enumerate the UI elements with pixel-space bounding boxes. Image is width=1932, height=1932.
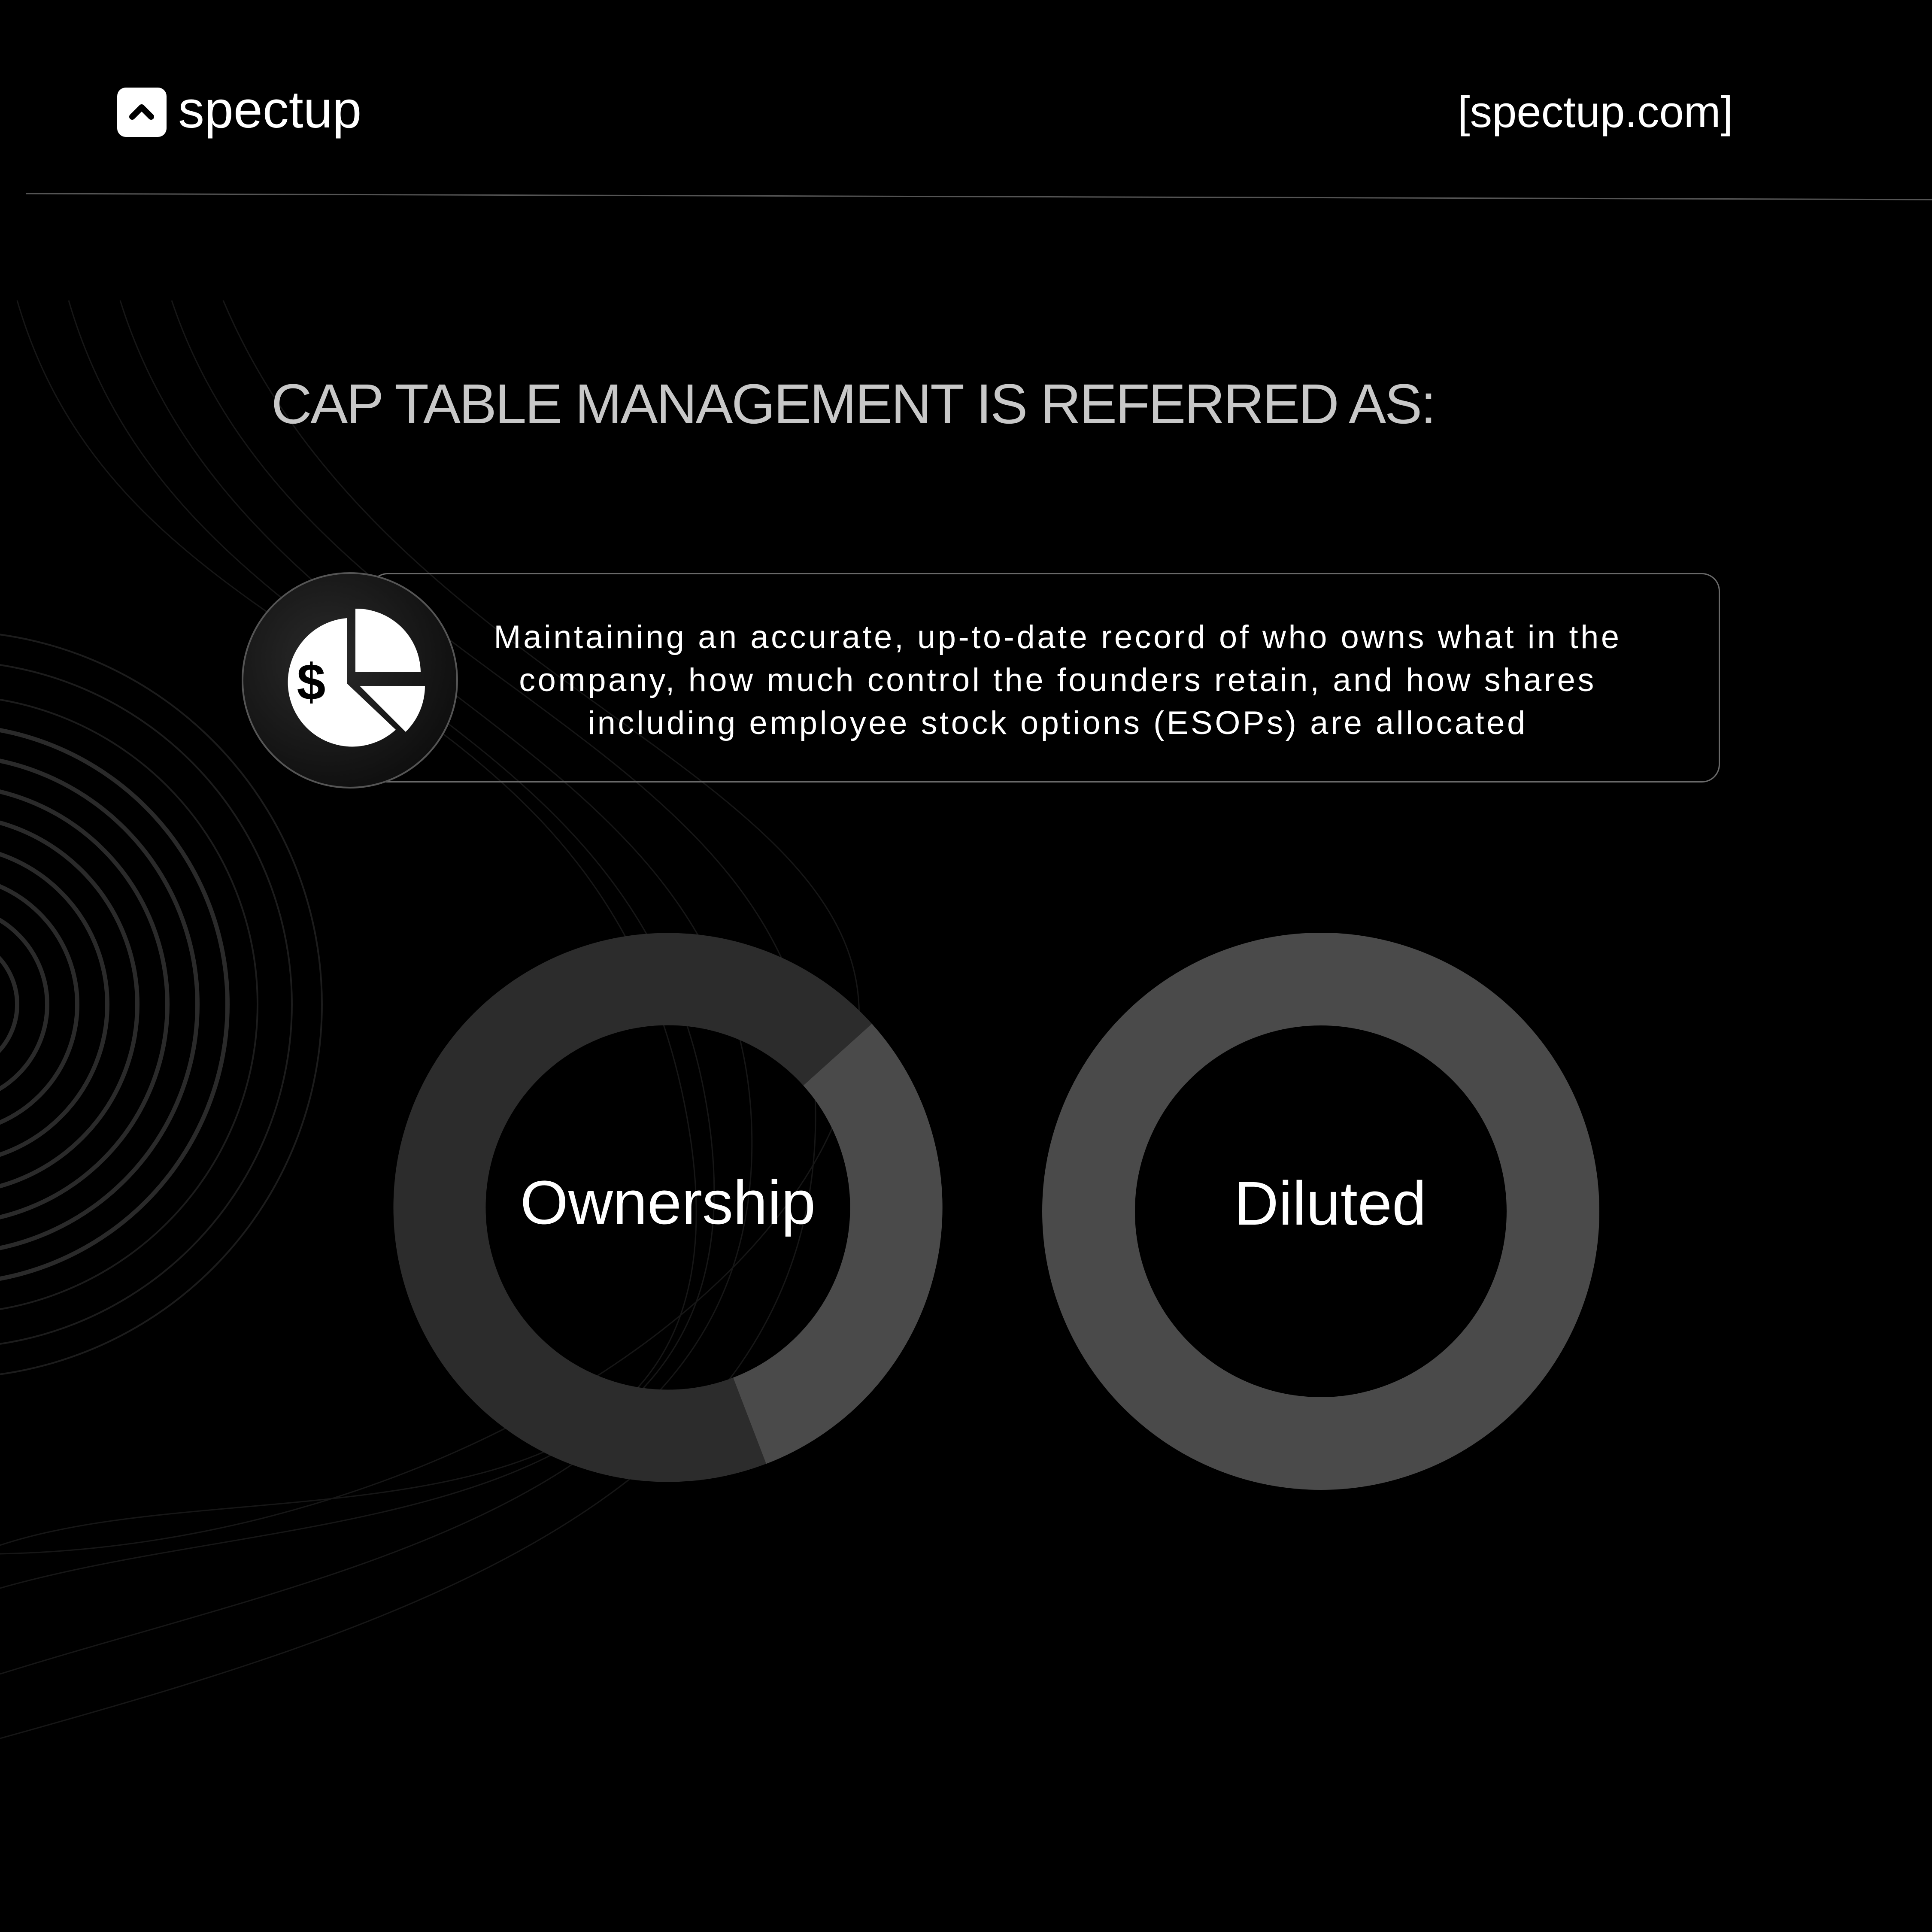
divider [0, 189, 1932, 206]
panel: definition card [370, 573, 1720, 783]
label: Diluted: Diluted [1234, 1169, 1426, 1238]
logo text: spectup [178, 80, 361, 139]
header: logo [117, 88, 383, 139]
chart: ownership donut [393, 933, 943, 1482]
icon: pie chart with dollar [240, 571, 459, 790]
text block: definition: Maintaining an accurate, up-to-date record of who owns what in the company, how much control the founders retain, and how shares including employee stock options (ESOPs) are allocated [494, 619, 1622, 741]
title: CAP TABLE MANAGEMENT IS REFERRED AS: [271, 372, 1435, 435]
label: Ownership: Ownership [520, 1168, 816, 1237]
header: url: [spectup.com] [1458, 87, 1733, 136]
chart: diluted donut [1042, 933, 1600, 1491]
icon: pie chart with dollar: $ [297, 653, 325, 711]
icon: logo mark [117, 88, 167, 137]
